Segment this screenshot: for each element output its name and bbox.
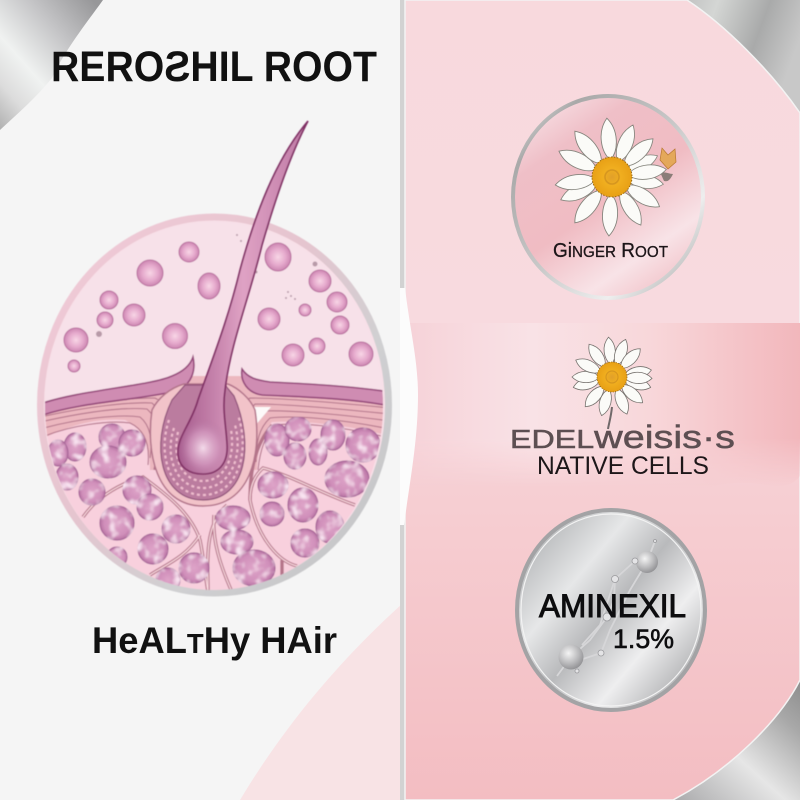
pink band behind edelweiss xyxy=(458,323,800,476)
native cells label: NATIVE CELLS xyxy=(537,452,709,480)
label: GiNGER ROOT xyxy=(553,240,668,262)
silver corner top left xyxy=(0,0,103,130)
upper fluid area xyxy=(40,215,390,415)
silver corner bottom right xyxy=(650,665,800,800)
coin xyxy=(517,510,705,710)
circle rim xyxy=(40,217,388,593)
gland void right xyxy=(254,406,271,424)
epidermis band right xyxy=(242,369,390,406)
circle contents xyxy=(44,234,384,590)
follicle sheath xyxy=(161,385,245,500)
badge: aminexil xyxy=(517,510,705,710)
label aminexil: AMINEXIL xyxy=(539,588,686,624)
icon: edelweiss flower xyxy=(572,337,652,429)
inner rim highlight xyxy=(521,514,701,706)
epidermis band xyxy=(40,357,194,416)
coin xyxy=(513,96,703,298)
dermis layers xyxy=(40,376,390,470)
badge: ginger root xyxy=(513,96,703,298)
lobe septa xyxy=(83,410,355,592)
heading: healthy hair: HeALTHy HAir xyxy=(92,620,337,661)
right panel divider strip xyxy=(400,0,405,800)
icon: leaves xyxy=(660,148,676,181)
silver corner top right xyxy=(640,0,800,130)
hair shaft xyxy=(178,121,308,474)
left panel background xyxy=(0,0,403,800)
specks xyxy=(96,234,318,337)
gland voids xyxy=(157,400,158,401)
fat layer background xyxy=(48,420,380,590)
follicle bulb xyxy=(182,426,220,474)
pink right panel xyxy=(405,0,800,800)
icon: daisy xyxy=(554,118,667,236)
icon: molecule xyxy=(557,540,658,676)
fat cells xyxy=(48,417,380,592)
follicle sheath outer xyxy=(150,384,257,506)
white bulge in panel edge xyxy=(400,288,418,525)
hair shaft and bulb xyxy=(177,121,308,478)
heading: reroshil root: REROƧHIL ROOT xyxy=(51,43,377,91)
floating cells xyxy=(64,242,373,372)
dermis layer lines xyxy=(40,398,390,470)
label 1.5%: 1.5% xyxy=(613,624,674,654)
lobe septa highlight xyxy=(83,468,355,592)
edelweiss label: EDEL weisis·s xyxy=(510,419,735,455)
pink wedge bottom left panel xyxy=(240,603,403,800)
ingredient: edelweiss xyxy=(510,337,735,480)
skin cross-section circle xyxy=(40,215,390,600)
follicle sheath dotted rings xyxy=(165,415,243,495)
